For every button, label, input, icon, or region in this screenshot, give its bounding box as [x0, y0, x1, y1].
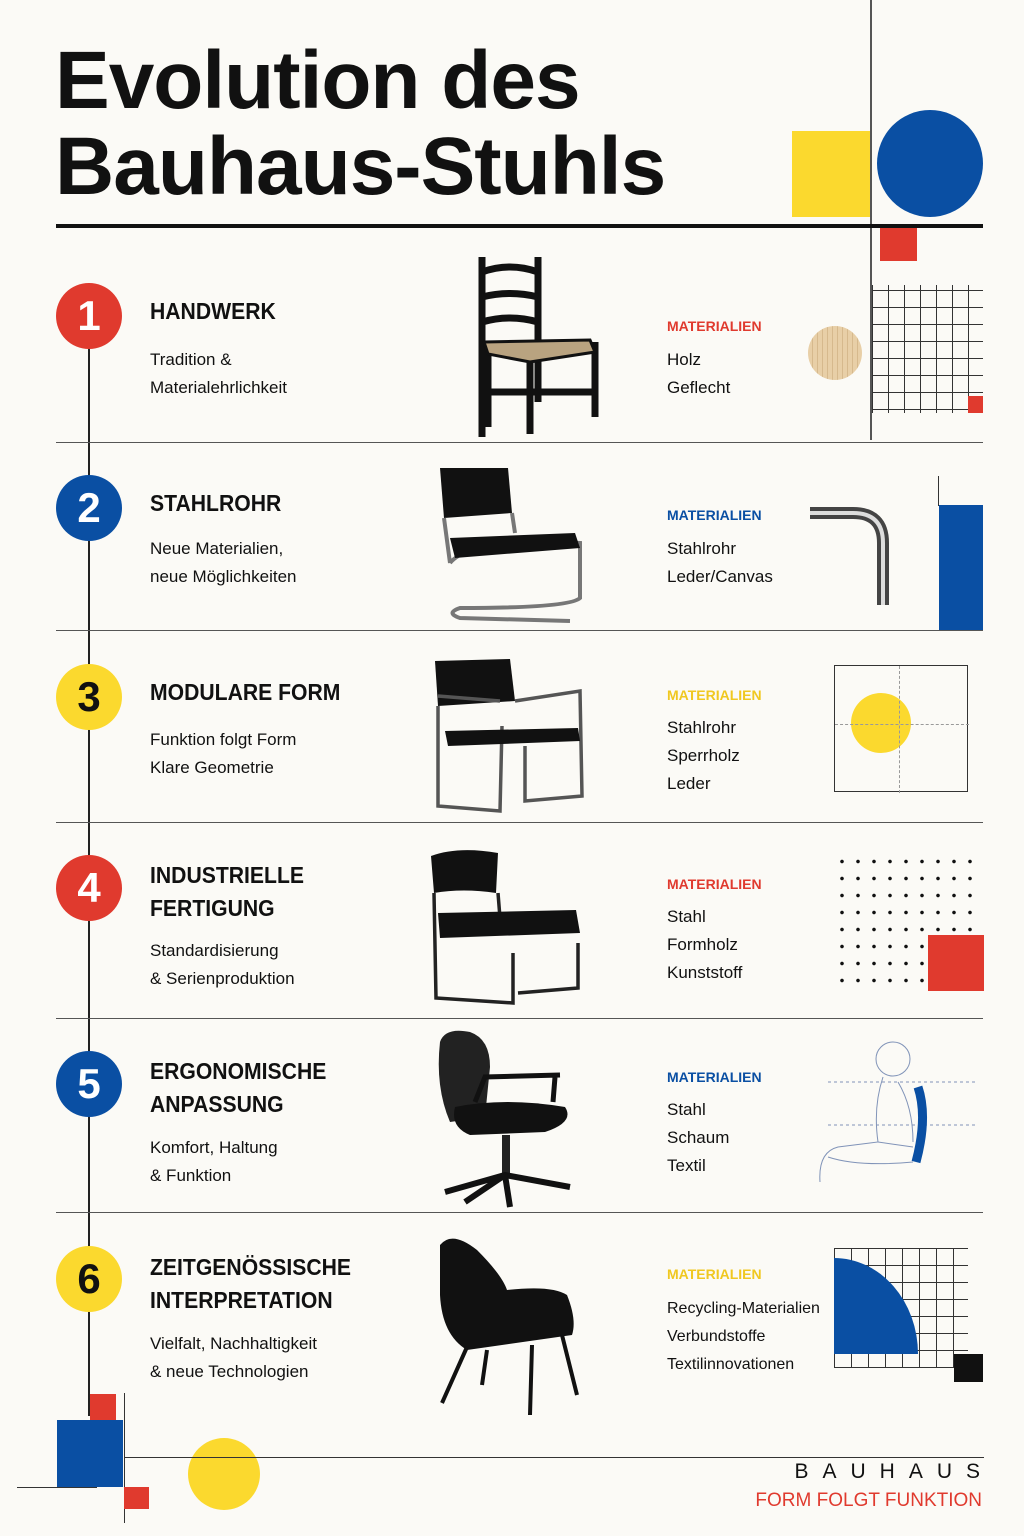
step 1: Tradition & — [150, 350, 232, 369]
step 1: HANDWERK — [150, 298, 276, 324]
step 1: 1 — [77, 292, 101, 339]
step 1 — [56, 257, 983, 437]
footer — [755, 1460, 994, 1511]
icon: quarter circle grid — [834, 1248, 983, 1382]
step 3: Stahlrohr — [667, 718, 736, 737]
title: Evolution des — [55, 35, 580, 126]
icon: grid — [872, 285, 983, 413]
step 4: Formholz — [667, 935, 738, 954]
step 6: Textilinnovationen — [667, 1356, 794, 1373]
step 2: Stahlrohr — [667, 539, 736, 558]
step 1: Materialehrlichkeit — [150, 378, 287, 397]
icon: wood sample — [808, 326, 862, 380]
step 5: Schaum — [667, 1128, 729, 1147]
step 4: MATERIALIEN — [667, 876, 762, 892]
step 3: Klare Geometrie — [150, 758, 274, 777]
icon: ergonomic figure — [819, 1042, 975, 1182]
step 4: 4 — [77, 864, 101, 911]
chair 1 — [478, 257, 598, 437]
title — [55, 35, 665, 212]
chair 5 — [438, 1030, 570, 1208]
step 3: Funktion folgt Form — [150, 730, 296, 749]
step 1: Holz — [667, 350, 701, 369]
step 6 — [56, 1238, 983, 1415]
step 3: 3 — [77, 673, 101, 720]
footer: BAUHAUS — [794, 1460, 994, 1483]
chair 3 — [435, 659, 584, 813]
step 4: Kunststoff — [667, 963, 742, 982]
step 4: FERTIGUNG — [150, 895, 275, 921]
chair 4 — [431, 850, 580, 1005]
step 1: MATERIALIEN — [667, 318, 762, 334]
step 5: & Funktion — [150, 1166, 231, 1185]
step 6: INTERPRETATION — [150, 1287, 333, 1313]
icon: steel tube — [810, 507, 889, 605]
step 6: MATERIALIEN — [667, 1266, 762, 1282]
step 4: Stahl — [667, 907, 706, 926]
step 6: & neue Technologien — [150, 1362, 308, 1381]
step 6: 6 — [77, 1255, 101, 1302]
decorative top composition — [56, 0, 983, 440]
step 3: Sperrholz — [667, 746, 740, 765]
icon: dot grid — [834, 853, 984, 993]
step 3: Leder — [667, 774, 710, 793]
title: Bauhaus-Stuhls — [55, 121, 665, 212]
step 6: Vielfalt, Nachhaltigkeit — [150, 1334, 317, 1353]
step 6: Recycling-Materialien — [667, 1300, 820, 1317]
step 2: MATERIALIEN — [667, 507, 762, 523]
step 2: neue Möglichkeiten — [150, 567, 296, 586]
footer: FORM FOLGT FUNKTION — [755, 1490, 982, 1511]
step 6: Verbundstoffe — [667, 1328, 765, 1345]
step 2: Leder/Canvas — [667, 567, 773, 586]
step 4: INDUSTRIELLE — [150, 862, 304, 888]
step 5: Stahl — [667, 1100, 706, 1119]
step 4: & Serienproduktion — [150, 969, 295, 988]
chair 6 — [440, 1238, 579, 1415]
step 5: ANPASSUNG — [150, 1091, 284, 1117]
icon: geometric square — [834, 665, 968, 792]
chair 2 — [440, 468, 582, 623]
step 6: ZEITGENÖSSISCHE — [150, 1254, 351, 1280]
step 4: Standardisierung — [150, 941, 279, 960]
step 5: Komfort, Haltung — [150, 1138, 278, 1157]
step 2 — [56, 468, 983, 630]
step 5: 5 — [77, 1060, 101, 1107]
step 2: 2 — [77, 484, 101, 531]
step 4 — [56, 850, 984, 1005]
step 1: Geflecht — [667, 378, 730, 397]
step 5 — [56, 1030, 975, 1208]
bottom-left composition — [17, 1393, 260, 1523]
step 2: Neue Materialien, — [150, 539, 283, 558]
step 3: MODULARE FORM — [150, 679, 340, 705]
step 5: MATERIALIEN — [667, 1069, 762, 1085]
step 5: ERGONOMISCHE — [150, 1058, 326, 1084]
step 5: Textil — [667, 1156, 706, 1175]
step 3: MATERIALIEN — [667, 687, 762, 703]
step 3 — [56, 659, 969, 813]
step 2: STAHLROHR — [150, 490, 281, 516]
timeline line — [88, 316, 90, 1416]
